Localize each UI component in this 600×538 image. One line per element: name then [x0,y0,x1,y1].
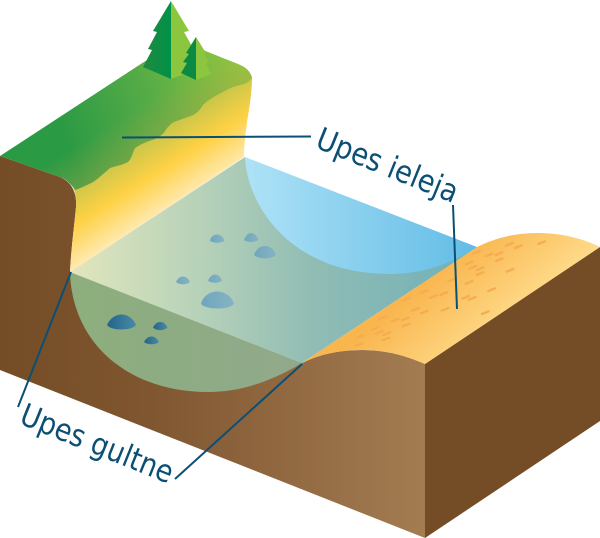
leader lines: Upes gultne [18,272,302,479]
rock [176,276,190,284]
rock [201,292,234,308]
rock [210,234,224,243]
panel: right soil face [425,247,600,538]
rock [107,314,136,330]
icon: large tree [143,1,193,79]
panel: grass top [0,45,252,190]
river front water section [70,272,302,392]
river surface [70,157,477,363]
panel: sand bank [302,233,600,364]
rock [244,233,258,242]
label: Upes ieleja: Upes ieleja [311,121,464,211]
rock [153,322,168,330]
panel: valley slope [66,65,252,272]
rock [144,336,159,344]
icon: small tree [181,37,211,80]
rock [254,246,276,258]
label: Upes gultne: Upes gultne [15,397,179,491]
river back wall water [245,157,477,290]
sand ripples [356,241,545,346]
rock [208,274,222,283]
panel: front soil face [0,156,425,538]
leader lines: Upes ieleja [122,136,457,309]
rocks [107,233,276,344]
